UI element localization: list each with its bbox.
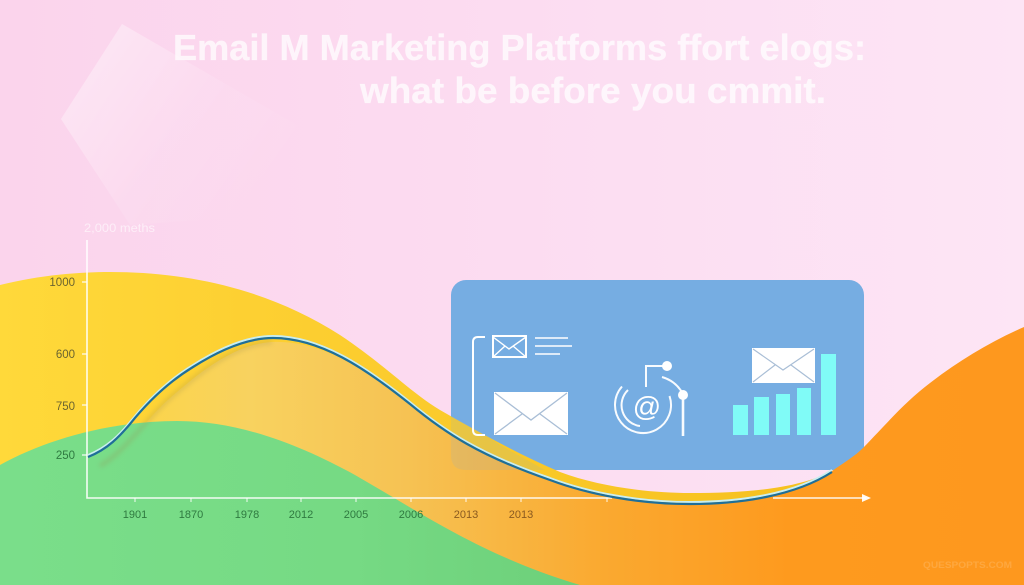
icon: at sign with nodes: @ xyxy=(633,391,661,422)
x axis labels: 1978 xyxy=(235,509,259,521)
y axis labels: 250 xyxy=(56,450,75,462)
icon group: email list xyxy=(473,336,572,435)
line shadow xyxy=(100,342,272,466)
title: Email M Marketing Platforms ffort elogs: xyxy=(173,27,866,68)
panel: blue email tools xyxy=(451,280,864,470)
y axis labels: 1000 xyxy=(49,277,75,289)
y axis labels: 750 xyxy=(56,401,75,413)
y axis labels xyxy=(49,277,75,462)
x axis labels: 2013 xyxy=(454,509,478,521)
x axis labels: 2006 xyxy=(399,509,423,521)
title xyxy=(173,27,866,111)
faint panel tint over waves xyxy=(451,412,545,470)
green wave xyxy=(0,421,580,585)
y axis labels: 600 xyxy=(56,349,75,361)
y axis title: 2,000 meths xyxy=(84,221,155,235)
x axis labels xyxy=(123,509,533,521)
title: what be before you cmmit. xyxy=(359,70,826,111)
trend line xyxy=(88,336,832,504)
chart axes xyxy=(82,240,871,502)
yellow wave xyxy=(0,272,832,585)
x axis labels: 1901 xyxy=(123,509,147,521)
x axis labels: 2005 xyxy=(344,509,368,521)
decorative pale rhombus xyxy=(61,24,340,225)
orange wave xyxy=(100,327,1024,585)
watermark: QUESPOPTS.COM xyxy=(923,560,1012,571)
icon: envelope and bar chart xyxy=(733,348,836,435)
x axis labels: 2012 xyxy=(289,509,313,521)
x axis labels: 2013 xyxy=(509,509,533,521)
icon: at sign with nodes xyxy=(615,361,688,436)
x axis labels: 1870 xyxy=(179,509,203,521)
